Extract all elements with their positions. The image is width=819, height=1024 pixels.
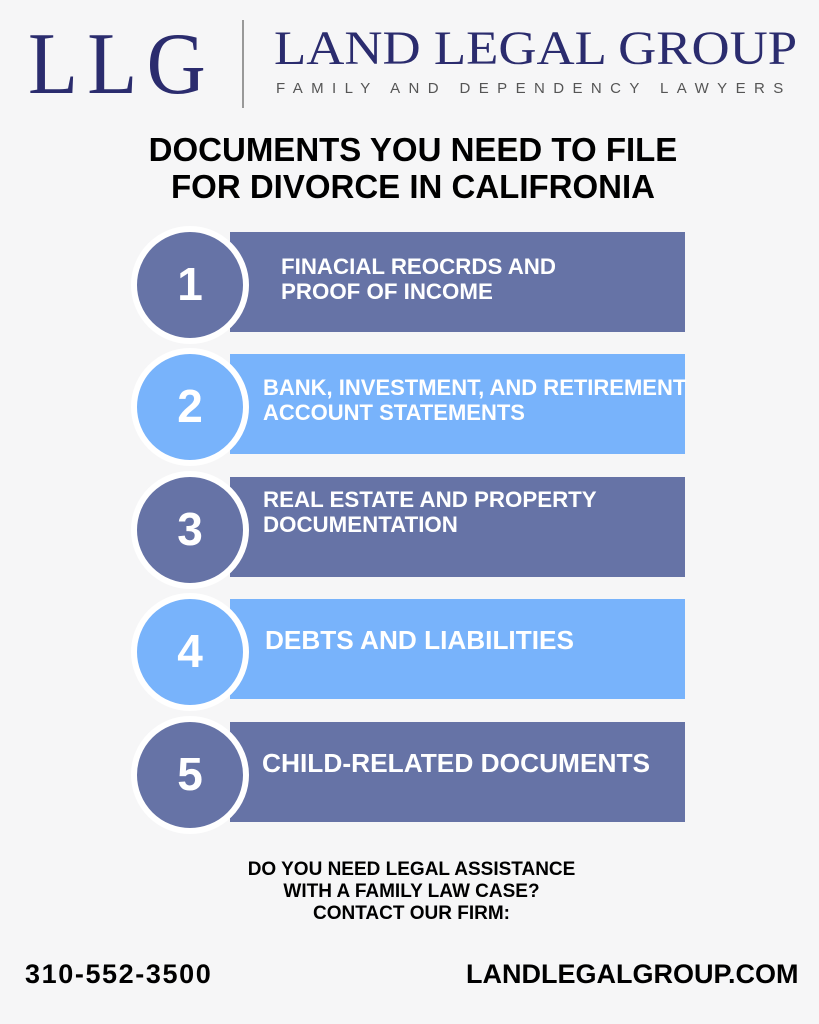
item 2: ACCOUNT STATEMENTS (263, 400, 525, 425)
call to action: WITH A FAMILY LAW CASE? (283, 881, 540, 902)
logo monogram: LLG (28, 16, 215, 113)
title: FOR DIVORCE IN CALIFRONIA (171, 168, 655, 205)
item 3: DOCUMENTATION (263, 512, 458, 537)
item 5: 5 (177, 748, 203, 800)
call to action: CONTACT OUR FIRM: (313, 903, 510, 924)
title: DOCUMENTS YOU NEED TO FILE (149, 131, 677, 168)
website: LANDLEGALGROUP.COM (466, 959, 799, 989)
tagline: FAMILY AND DEPENDENCY LAWYERS (276, 80, 792, 97)
item 5 (131, 716, 685, 834)
item 1: 1 (177, 258, 203, 310)
item 2: BANK, INVESTMENT, AND RETIREMENT (263, 375, 686, 400)
item 4: 4 (177, 625, 203, 677)
item 4 (131, 593, 685, 711)
item 2: 2 (177, 380, 203, 432)
call to action: DO YOU NEED LEGAL ASSISTANCE (248, 859, 575, 880)
call to action (248, 859, 575, 924)
item 1: PROOF OF INCOME (281, 279, 493, 304)
item 1 (131, 226, 685, 344)
phone: 310-552-3500 (25, 959, 212, 989)
item 5: CHILD-RELATED DOCUMENTS (262, 748, 650, 778)
item 3: REAL ESTATE AND PROPERTY (263, 487, 597, 512)
item 2 (131, 348, 686, 466)
firm name: LAND LEGAL GROUP (274, 22, 797, 75)
item 3 (131, 471, 685, 589)
item 4: DEBTS AND LIABILITIES (265, 625, 574, 655)
logo (28, 16, 797, 113)
item 3: 3 (177, 503, 203, 555)
item 1: FINACIAL REOCRDS AND (281, 254, 556, 279)
title (149, 131, 677, 205)
